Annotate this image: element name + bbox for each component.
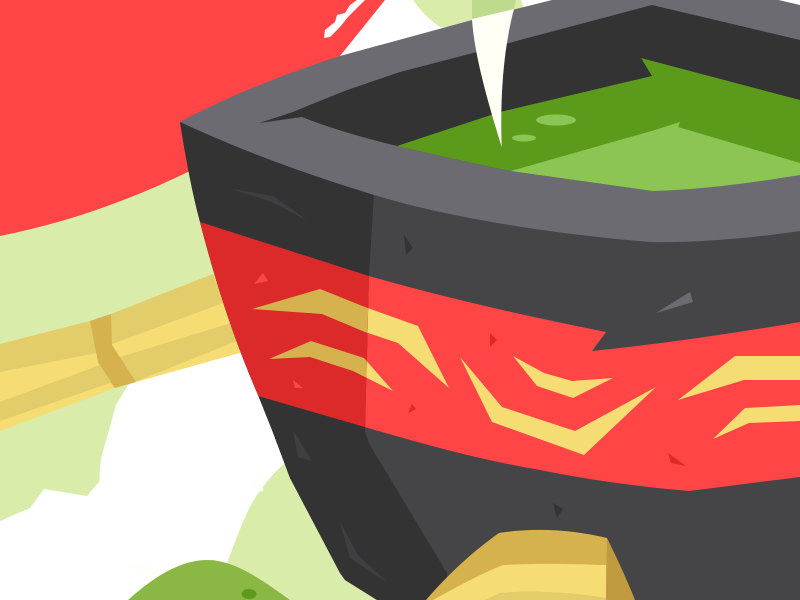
background: faint cream smudges: [127, 476, 265, 578]
mortar body with band: [180, 122, 800, 600]
white splash on red circle: [324, 0, 365, 38]
mortar red band: [180, 215, 800, 491]
band chevrons right: [678, 356, 800, 439]
band chevrons left: [366, 308, 449, 391]
left side shadow on mortar: [180, 122, 447, 600]
pestle tip drip: [472, 9, 514, 147]
mortar rim: [180, 0, 800, 242]
liquid highlight: [511, 122, 800, 191]
mortar opening: [259, 5, 800, 191]
small band flecks: [408, 333, 686, 466]
background: pale green blob top: [413, 0, 530, 27]
gold foot of mortar: [426, 530, 635, 600]
background: pale green blob lower: [228, 463, 390, 600]
overlap shade above drip: [472, 0, 516, 19]
green liquid: [397, 58, 800, 191]
liquid bubbles: [512, 114, 576, 142]
stone texture marks: [232, 189, 693, 583]
background: pale green blob left: [0, 160, 250, 521]
band chevrons middle: [460, 356, 656, 455]
pestle handle: [0, 274, 250, 431]
green hill: [128, 560, 290, 600]
background: red circle: [0, 0, 385, 236]
